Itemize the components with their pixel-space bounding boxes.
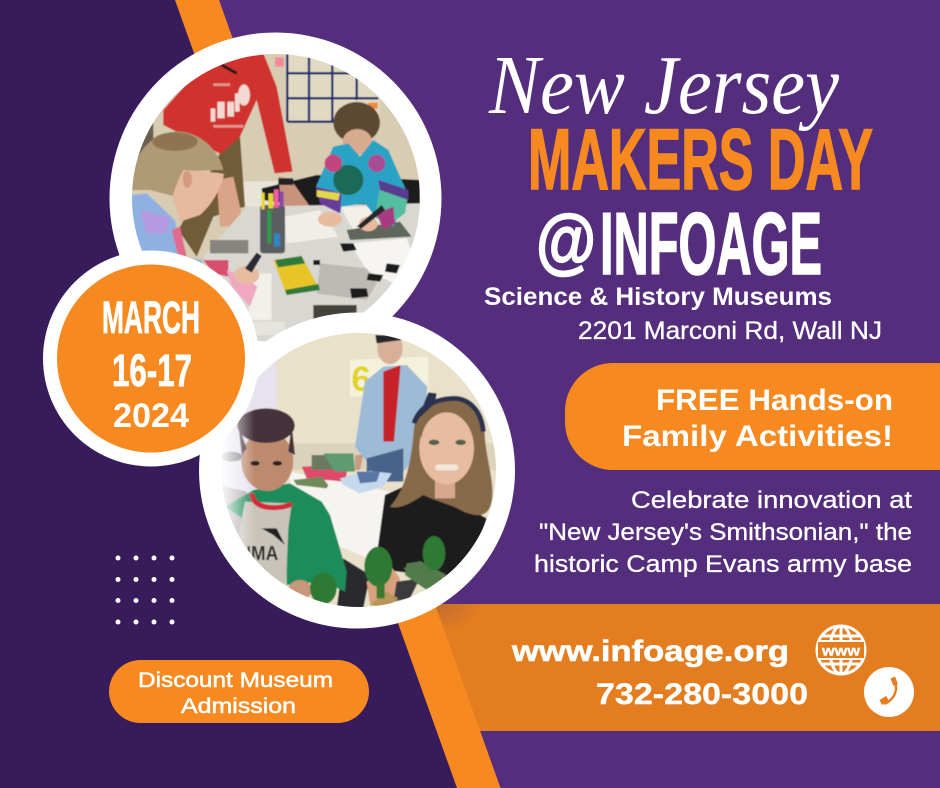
description text: "New Jersey's Smithsonian," the	[539, 519, 912, 546]
icon: telephone	[864, 667, 914, 717]
date: year: 2024	[113, 397, 189, 435]
venue name: Science & History Museums	[484, 283, 832, 311]
website: www.infoage.org	[511, 635, 789, 668]
description text	[534, 487, 912, 578]
photo circle: children holding model trees: UMA	[238, 542, 278, 565]
phone number: 732-280-3000	[596, 678, 808, 711]
free activities banner: Family Activities!	[622, 420, 893, 453]
orange contact band	[432, 604, 940, 731]
date: month: MARCH	[102, 292, 200, 343]
title: @InfoAge: @	[536, 201, 596, 281]
free activities banner: FREE Hands-on	[656, 384, 893, 417]
free activities banner	[565, 363, 940, 470]
orange diagonal stripe	[175, 0, 500, 788]
photo circle: children holding model trees	[190, 312, 520, 628]
discount admission pill: Discount Museum	[138, 669, 333, 692]
title: @InfoAge	[536, 194, 822, 293]
date badge	[43, 250, 259, 466]
photo circle: children holding model trees: 6	[351, 360, 371, 399]
discount admission pill: Admission	[181, 695, 296, 718]
date: days: 16-17	[112, 345, 192, 396]
venue address: 2201 Marconi Rd, Wall NJ	[578, 317, 882, 345]
description text: historic Camp Evans army base	[534, 551, 912, 578]
icon: www globe: www	[821, 642, 860, 658]
icon: www globe	[817, 626, 865, 674]
discount admission pill	[109, 660, 369, 723]
dark purple left panel	[0, 0, 457, 788]
decorative dot grid	[116, 556, 174, 624]
description text: Celebrate innovation at	[631, 487, 912, 514]
title: New Jersey: New Jersey	[488, 39, 840, 132]
photo circle: children at marker table	[110, 32, 442, 364]
